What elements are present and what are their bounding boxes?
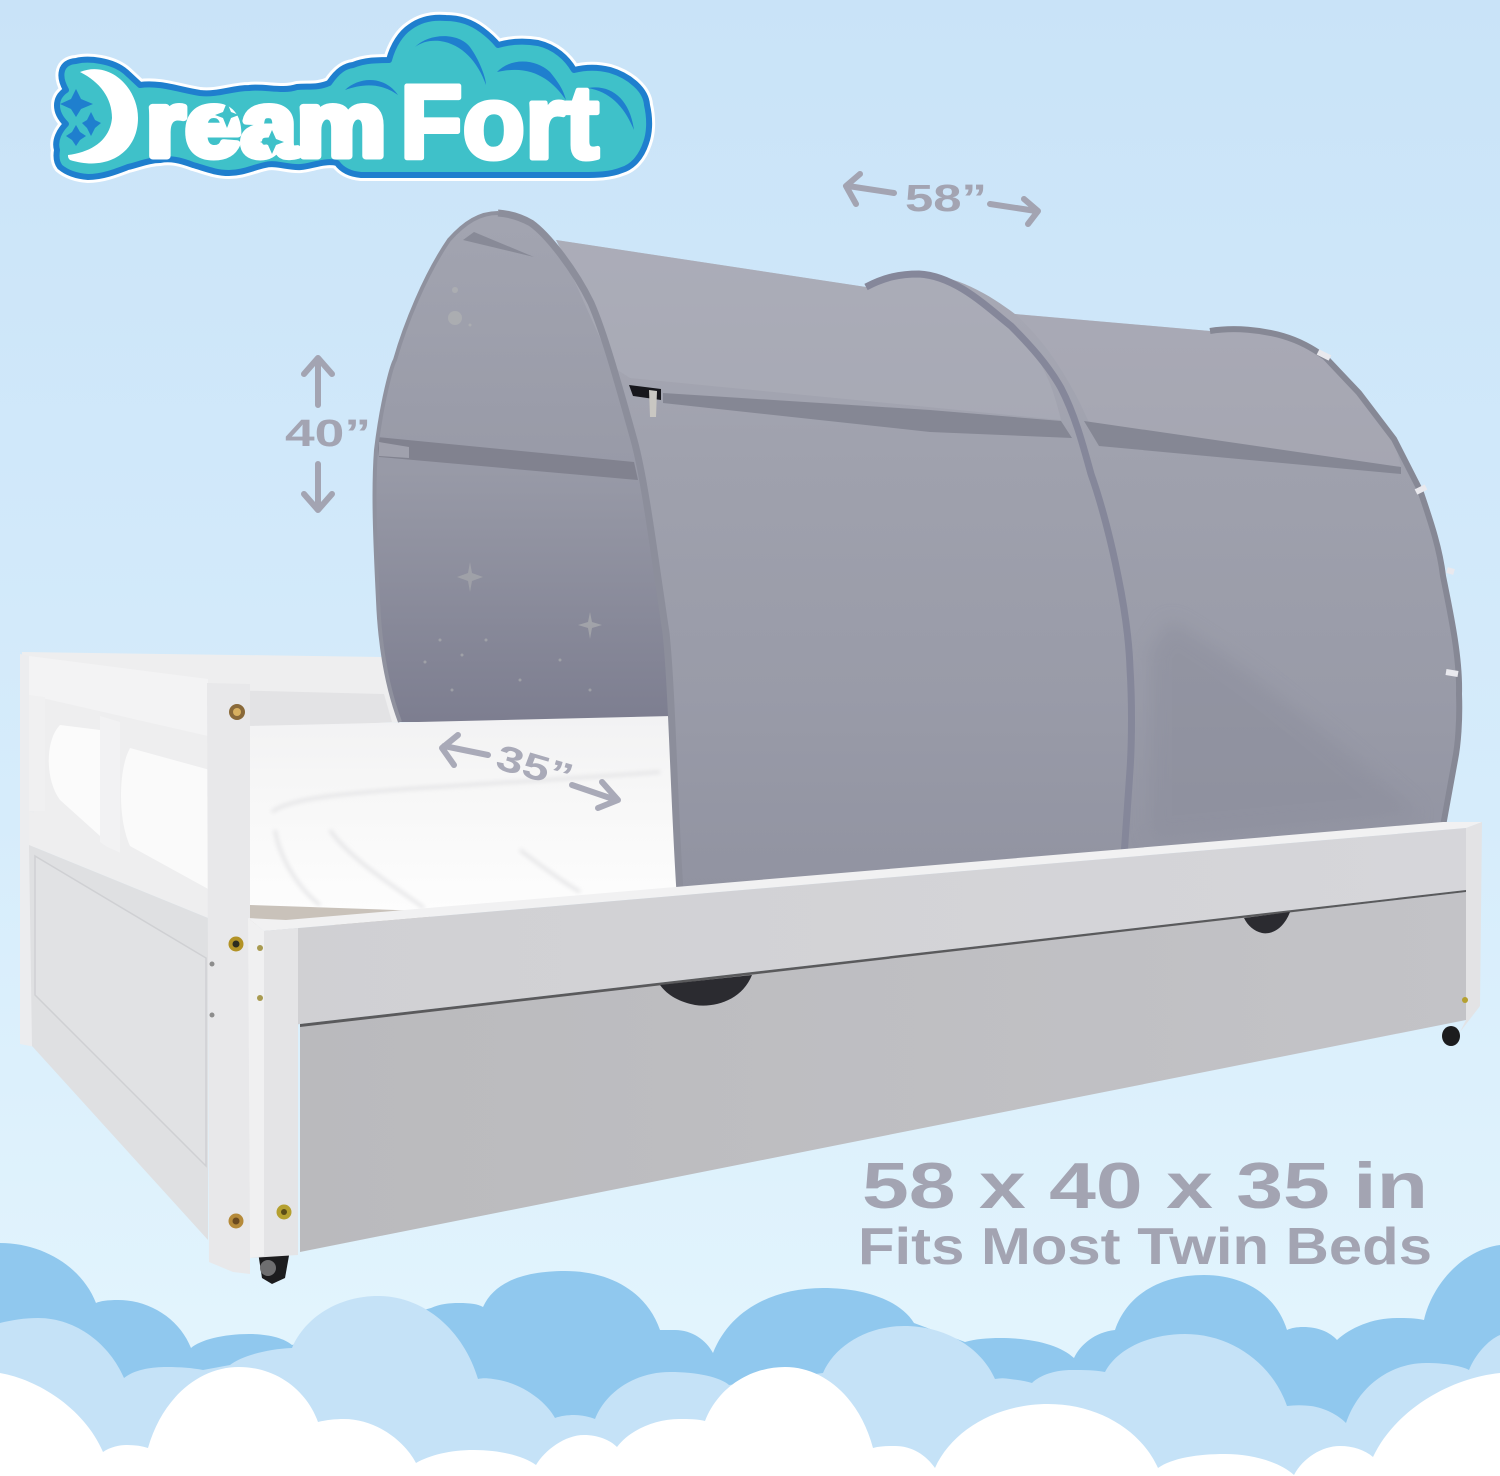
right post xyxy=(1460,822,1482,1032)
arrow left xyxy=(846,174,894,204)
upper roof panels xyxy=(556,240,1061,420)
drawer handle cutouts xyxy=(660,975,752,1006)
dimension: depth 35 inches: 35” xyxy=(492,736,578,797)
dimension: height 40 inches: 40” xyxy=(285,413,371,455)
logo: DreamFort: Fort xyxy=(400,65,599,181)
rear hoop edge xyxy=(1210,329,1459,826)
fabric crease on rear panel xyxy=(1150,620,1420,840)
logo cloud highlights xyxy=(345,36,634,130)
arrow right xyxy=(990,199,1038,224)
subheading fit text: Fits Most Twin Beds xyxy=(858,1218,1432,1276)
front hoop xyxy=(498,213,680,892)
tent interior end xyxy=(375,213,680,722)
clouds at the bottom xyxy=(0,1243,1500,1476)
headboard back board xyxy=(22,652,402,900)
logo: DreamFort xyxy=(56,18,649,181)
arrow down xyxy=(304,464,332,510)
interior stars xyxy=(424,287,602,692)
front white cloud layer xyxy=(0,1367,1500,1476)
logo moon crescent (letter D) xyxy=(68,69,138,164)
middle pale cloud layer xyxy=(0,1296,1500,1476)
drawer face xyxy=(300,892,1466,1252)
rail front xyxy=(264,828,1466,1030)
left post xyxy=(248,918,298,1258)
zipper opening and pull xyxy=(629,385,661,400)
headline size text: 58 x 40 x 35 in xyxy=(862,1149,1428,1222)
tent straps xyxy=(1318,352,1458,674)
arrow up xyxy=(304,358,332,405)
tent main fabric xyxy=(498,213,1459,892)
back blue cloud layer xyxy=(0,1243,1500,1476)
arrow left xyxy=(442,735,488,765)
trundle bed frame and drawer xyxy=(248,822,1482,1284)
dimension: width 58 inches: 58” xyxy=(905,178,987,220)
interior zipper band xyxy=(377,437,638,480)
dimension: depth 35 inches xyxy=(442,735,618,808)
bed tent and bed product photo xyxy=(20,213,1482,1284)
logo letter sparkles xyxy=(215,102,284,154)
interior fold xyxy=(463,232,534,257)
zipper seams xyxy=(663,393,1072,438)
gap shadow xyxy=(300,890,1466,1027)
dimension: width 58 inches xyxy=(846,174,1038,224)
logo cloud badge xyxy=(56,18,649,177)
mattress xyxy=(248,716,678,925)
tent left end hoop xyxy=(375,213,498,722)
second hoop xyxy=(866,274,1132,856)
arrow right xyxy=(572,782,618,808)
logo wordmark: ream xyxy=(146,74,386,176)
brass screws xyxy=(229,704,245,720)
dimension: height 40 inches xyxy=(285,358,371,510)
casters xyxy=(258,1250,290,1284)
frame screws xyxy=(257,945,263,951)
logo moon stars xyxy=(60,89,101,146)
side end panel of bed xyxy=(20,654,250,1274)
mattress seen through the side rails xyxy=(49,725,100,836)
rail top edge xyxy=(248,822,1482,931)
